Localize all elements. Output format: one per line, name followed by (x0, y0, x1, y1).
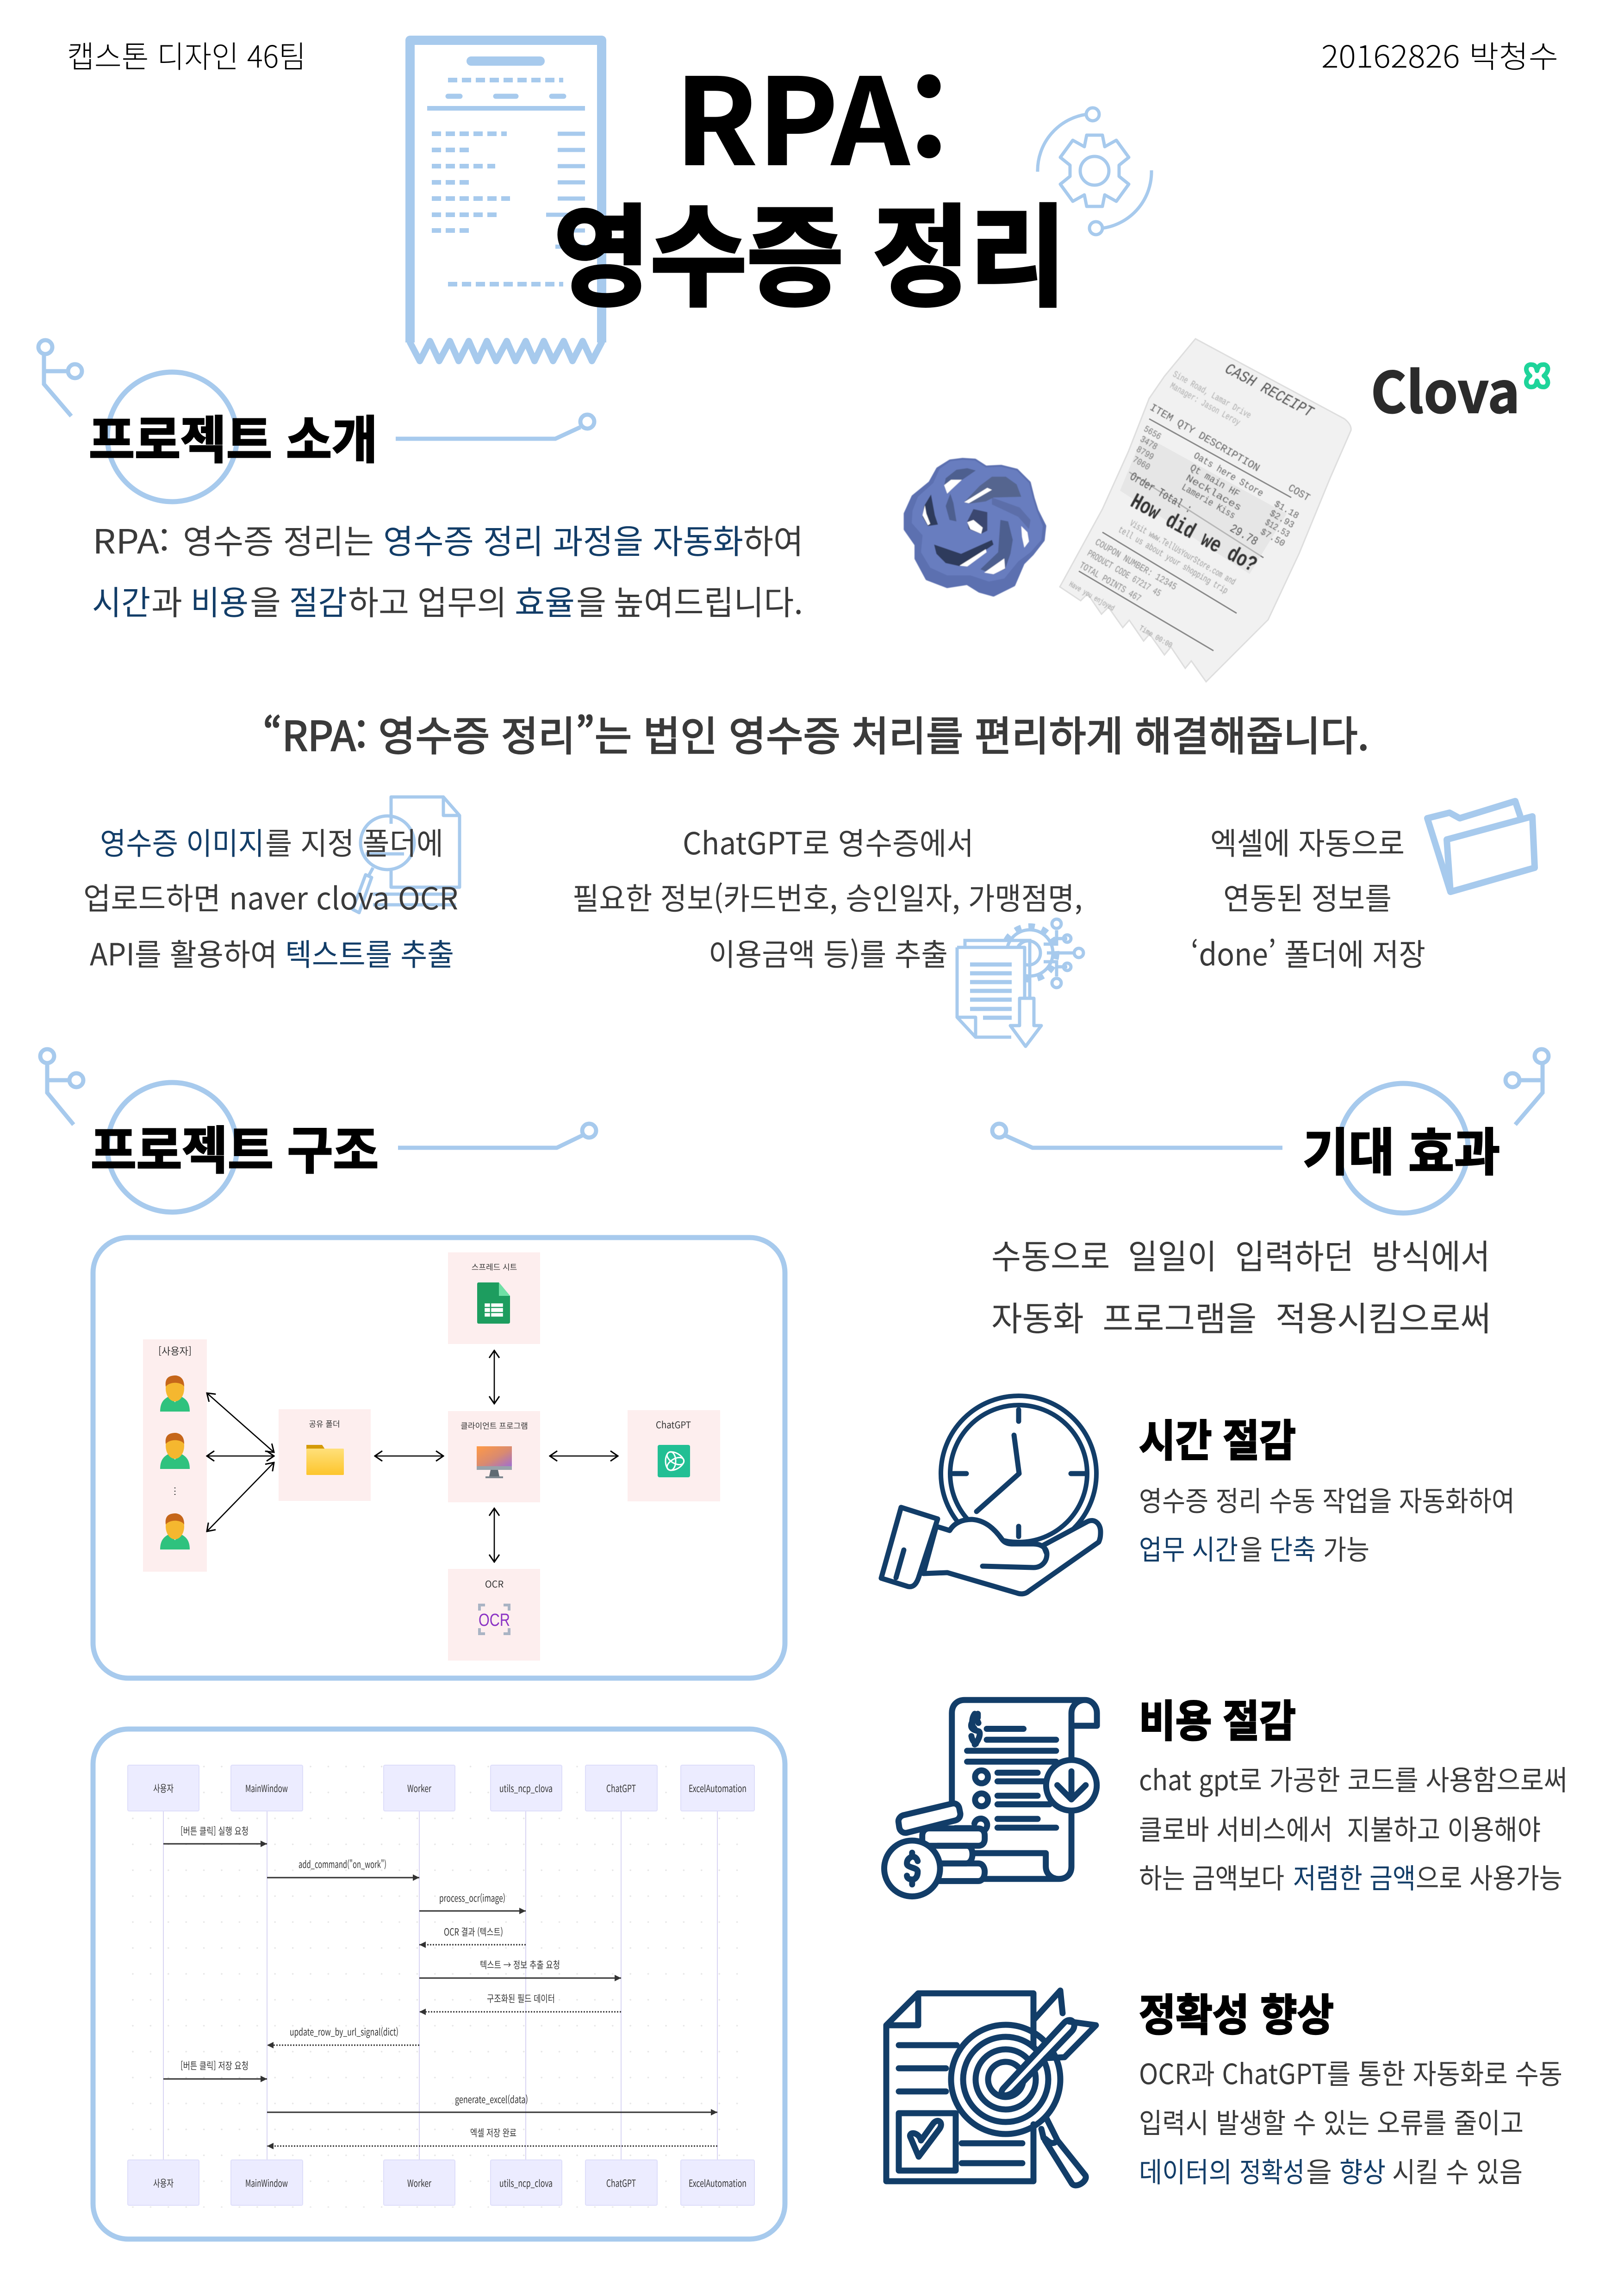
circuit decoration (1506, 1049, 1549, 1125)
lifelines (163, 1811, 717, 2160)
message labels (180, 1824, 560, 2140)
message labels: generate_excel(data) (455, 2092, 528, 2106)
receipt printed text: Order Total : (1127, 470, 1195, 516)
message labels: 엑셀 저장 완료 (470, 2126, 516, 2140)
receipt printed text: 8799 (1134, 444, 1156, 463)
logo: Clova: Clova (1371, 348, 1520, 429)
actors bottom (128, 2160, 754, 2205)
icon: OCR scan: OCR (479, 1611, 510, 1630)
receipt printed text: How did we do? (1126, 490, 1261, 578)
icon: user 3 (160, 1513, 190, 1549)
title (554, 27, 1066, 328)
feature column: extract: 이용금액 등)를 추출 (709, 930, 948, 975)
receipt printed text: PRODUCT CODE 67217 45 (1085, 548, 1163, 599)
benefit: accuracy improvement: 정확성 향상 (1139, 1980, 1334, 2043)
receipt printed text: Oats here Store (1191, 451, 1265, 499)
circuit decoration (38, 340, 82, 416)
benefit: time saving: 시간 절감 (1139, 1406, 1296, 1469)
receipt printed text: Manager: Jason Leroy (1168, 381, 1242, 429)
message labels: [버튼 클릭] 저장 요청 (180, 2059, 249, 2072)
benefit: time saving: 업무 시간 (1139, 1528, 1238, 1568)
section heading: expected effects (992, 1049, 1549, 1213)
benefit: accuracy improvement: 을 (1306, 2150, 1332, 2190)
benefit: time saving: 단축 (1269, 1528, 1316, 1568)
message labels: process_ocr(image) (439, 1891, 505, 1905)
benefit: accuracy improvement: 데이터의 (1139, 2150, 1232, 2190)
receipt printed text: $2.93 (1267, 508, 1296, 531)
icon: gear with orbit (1038, 108, 1151, 235)
actors top: utils_ncp_clova (499, 1781, 553, 1795)
benefit: time saving: 을 (1240, 1528, 1263, 1568)
node: shared folder (279, 1409, 371, 1501)
icon: sheets (477, 1282, 510, 1324)
benefit: accuracy improvement: 향상 (1339, 2150, 1386, 2190)
effects intro text: 수동으로 일일이 입력하던 방식에서 (991, 1230, 1490, 1279)
node: spreadsheet: 스프레드 시트 (472, 1261, 517, 1272)
node: ChatGPT: ChatGPT (656, 1418, 691, 1431)
title: RPA: (675, 27, 949, 199)
feature column: upload (83, 819, 458, 975)
receipt printed text: $1.18 (1272, 499, 1300, 522)
benefit: cost saving: 저렴한 금액 (1293, 1856, 1416, 1897)
receipt printed text: Have you enjoyed (1067, 580, 1116, 613)
benefit: cost saving: chat gpt로 가공한 코드를 사용함으로써 (1139, 1758, 1568, 1798)
messages (163, 1844, 717, 2146)
connector line (992, 1124, 1282, 1148)
actors bottom: ChatGPT (606, 2176, 636, 2190)
benefit: accuracy improvement: 입력시 발생할 수 있는 오류를 줄이고 (1139, 2101, 1524, 2141)
node: OCR: OCR (485, 1577, 504, 1590)
icon: user 1 (160, 1375, 190, 1412)
effects intro text (991, 1230, 1491, 1341)
node: shared folder: 공유 폴더 (309, 1418, 340, 1429)
receipt printed text: TOTAL POINTS 467 (1077, 560, 1143, 604)
benefit: accuracy improvement: OCR과 ChatGPT를 통한 자동화로 수동 (1139, 2052, 1562, 2092)
icon: 3D knot logo (906, 460, 1045, 595)
actors bottom: MainWindow (245, 2176, 288, 2190)
benefit: cost saving (1139, 1686, 1568, 1897)
actors top: MainWindow (245, 1781, 288, 1795)
benefit: accuracy improvement: 시킬 수 있음 (1392, 2150, 1523, 2190)
connector line (396, 415, 594, 439)
feature column: save: ‘done’ 폴더에 저장 (1191, 930, 1425, 975)
node: ChatGPT (628, 1410, 720, 1501)
intro paragraph: 하여 (743, 515, 803, 563)
intro paragraph: 업무의 (417, 576, 507, 624)
receipt printed text: Time 00:00 (1137, 624, 1174, 650)
actors top: Worker (407, 1781, 432, 1795)
receipt printed text: 3478 (1138, 434, 1159, 453)
circuit decoration (40, 1049, 83, 1125)
benefit: accuracy improvement: 정확성 (1239, 2150, 1305, 2190)
receipt printed text: tell us about your shopping trip (1116, 525, 1230, 597)
receipt printed text: CASH RECEIPT (1222, 361, 1316, 422)
receipt printed text: Sine Road, Lamar Drive (1171, 369, 1253, 421)
icon: document with magnifier (353, 797, 460, 913)
receipt printed text: Lamerie Kiss (1179, 482, 1237, 522)
actors bottom: 사용자 (153, 2176, 174, 2190)
section heading: project intro (38, 340, 594, 502)
intro paragraph: 높여드립니다. (614, 576, 803, 624)
icon: clover mark (1526, 365, 1548, 387)
icon: invoice with coins (884, 1700, 1097, 1897)
benefit: cost saving: 클로바 서비스에서 지불하고 이용해야 (1139, 1808, 1541, 1848)
team label: 캡스톤 디자인 46팀 (67, 32, 306, 77)
heading circle (107, 372, 237, 502)
benefit: cost saving: 비용 절감 (1139, 1686, 1296, 1749)
feature column: upload: 영수증 이미지 (100, 819, 264, 864)
intro paragraph: 비용 (191, 576, 249, 624)
intro paragraph: 과 (151, 576, 182, 624)
receipt printed text: 7060 (1130, 454, 1152, 473)
author label: 20162826 박청수 (1321, 32, 1558, 77)
icon: clock on hand (881, 1396, 1101, 1594)
feature column: save: 연동된 정보를 (1223, 874, 1392, 919)
icon: monitor (477, 1446, 512, 1478)
intro paragraph: 영수증 정리 과정을 자동화 (383, 515, 743, 563)
message labels: [버튼 클릭] 실행 요청 (180, 1824, 249, 1838)
actors top (128, 1765, 754, 1811)
node: client program (448, 1411, 540, 1502)
intro paragraph: 을 (576, 576, 606, 624)
icon: target on document with magnifier (886, 1991, 1096, 2185)
panel: sequence diagram (93, 1729, 785, 2239)
message labels: add_command("on_work") (299, 1857, 386, 1871)
ellipsis dots (174, 1487, 175, 1495)
feature column: save: 엑셀에 자동으로 (1210, 819, 1405, 864)
receipt printed text: Necklaces (1184, 473, 1243, 514)
receipt printed text (1067, 361, 1316, 650)
receipt printed text: $7.50 (1258, 527, 1287, 549)
feature column: extract: 필요한 정보(카드번호, 승인일자, 가맹점명, (572, 874, 1083, 919)
node: client program: 클라이언트 프로그램 (460, 1419, 528, 1431)
effects intro text: 자동화 프로그램을 적용시킴으로써 (991, 1292, 1491, 1341)
receipt printed text: 5656 (1141, 424, 1163, 442)
receipt printed text: COST (1286, 482, 1312, 504)
message labels: update_row_by_url_signal(dict) (290, 2025, 398, 2039)
feature column: upload: 텍스트를 추출 (285, 930, 454, 975)
message labels: 구조화된 필드 데이터 (487, 1991, 555, 2005)
connector line (398, 1124, 596, 1148)
feature column: upload: 업로드하면 naver clova OCR (83, 874, 458, 919)
intro paragraph: 시간 (92, 576, 150, 624)
receipt printed text: Qt main HF (1188, 463, 1241, 500)
feature column: save (1191, 819, 1425, 975)
actors top: 사용자 (153, 1781, 174, 1795)
icon: folder (1427, 801, 1535, 892)
actors top: ExcelAutomation (689, 1781, 747, 1795)
intro paragraph: 영수증 정리는 (183, 515, 374, 563)
subheading: “RPA: 영수증 정리”는 법인 영수증 처리를 편리하게 해결해줍니다. (263, 704, 1369, 763)
icon: user 2 (160, 1433, 190, 1469)
image: crumpled paper receipt (1060, 339, 1351, 682)
message labels: 텍스트 → 정보 추출 요청 (480, 1958, 560, 1972)
intro paragraph: 효율 (515, 576, 575, 624)
node: users: [사용자] (158, 1344, 192, 1358)
heading text: 프로젝트 소개 (89, 399, 378, 473)
intro paragraph: 절감 (289, 576, 347, 624)
message labels: OCR 결과 (텍스트) (444, 1925, 503, 1939)
feature column: extract: ChatGPT로 영수증에서 (683, 819, 974, 864)
receipt printed text: COUPON NUMBER: 12345 (1093, 537, 1178, 593)
actors bottom: utils_ncp_clova (499, 2176, 553, 2190)
icon: receipt outline (410, 40, 602, 361)
actors bottom: ExcelAutomation (689, 2176, 747, 2190)
feature column: upload: API를 활용하여 (90, 930, 277, 975)
arrows between nodes (207, 1350, 618, 1562)
actors bottom: Worker (407, 2176, 432, 2190)
benefit: time saving: 가능 (1323, 1528, 1369, 1568)
heading circle (1338, 1083, 1468, 1213)
feature column: upload: 를 지정 폴더에 (265, 819, 443, 864)
intro paragraph: 하고 (348, 576, 409, 624)
heading text: 기대 효과 (1303, 1111, 1500, 1185)
benefit: cost saving: 으로 사용가능 (1416, 1856, 1562, 1897)
receipt printed text: ITEM QTY DESCRIPTION (1148, 402, 1262, 474)
intro paragraph: RPA: (93, 515, 169, 563)
benefit: cost saving: 하는 금액보다 (1139, 1856, 1284, 1897)
receipt printed text: 29.78 (1227, 522, 1260, 548)
feature column: extract (572, 819, 1083, 975)
heading circle (107, 1083, 237, 1212)
panel: system architecture diagram (93, 1238, 785, 1678)
node: spreadsheet (448, 1252, 540, 1344)
receipt printed text: Visit www.TellUsYourStore.com and (1127, 518, 1237, 588)
benefit: accuracy improvement (1139, 1980, 1562, 2190)
heading text: 프로젝트 구조 (91, 1109, 379, 1183)
benefit: time saving (1139, 1406, 1515, 1568)
icon: ChatGPT logo (658, 1445, 690, 1477)
intro paragraph (92, 515, 803, 624)
node: OCR (448, 1569, 540, 1661)
intro paragraph: 을 (250, 576, 281, 624)
icon: document processing with gear and arrow (957, 919, 1083, 1046)
receipt printed text: $12.53 (1263, 517, 1291, 540)
benefit: time saving: 영수증 정리 수동 작업을 자동화하여 (1139, 1479, 1515, 1519)
node: users (143, 1339, 207, 1572)
icon: OCR scan (479, 1605, 510, 1634)
actors top: ChatGPT (606, 1781, 636, 1795)
section heading: project structure (40, 1049, 596, 1212)
icon: yellow folder (306, 1445, 344, 1475)
title: 영수증 정리 (554, 168, 1066, 328)
